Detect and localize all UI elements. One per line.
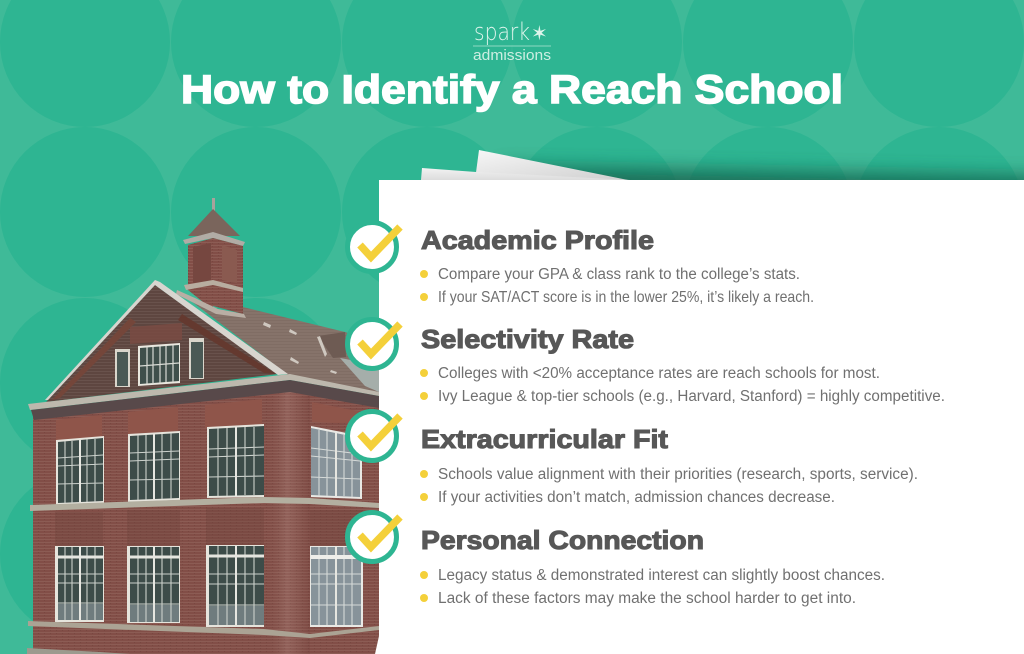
- bullets: If your activities don’t match, admission chances decrease.: [438, 489, 835, 506]
- check icon: [348, 512, 400, 562]
- panel shadow on background: [500, 166, 1024, 200]
- logo: spark admissions: admissions: [473, 47, 551, 64]
- roof edge trim: [45, 280, 288, 400]
- section: selectivity rate: [348, 320, 945, 405]
- bullets: [420, 266, 814, 306]
- paper sheets behind panel: [421, 150, 630, 180]
- bullets: Lack of these factors may make the school harder to get into.: [438, 590, 856, 607]
- lower spandrels: [55, 508, 362, 546]
- check icon: [348, 412, 400, 460]
- middle stone band: [30, 497, 379, 511]
- check icon: [348, 222, 400, 272]
- heading: Academic Profile: [421, 225, 654, 255]
- bullets: [420, 466, 918, 506]
- white content panel: [379, 180, 1024, 654]
- building illustration: [27, 198, 379, 654]
- logo: spark admissions: [473, 18, 551, 64]
- bullets: Colleges with <20% acceptance rates are reach schools for most.: [438, 365, 880, 382]
- logo: spark admissions: spark: [474, 18, 530, 46]
- gable wall: [46, 285, 278, 402]
- bullets: Legacy status & demonstrated interest can slightly boost chances.: [438, 567, 885, 584]
- bullets: Schools value alignment with their priorities (research, sports, service).: [438, 466, 918, 483]
- bullets: If your SAT/ACT score is in the lower 25%, it’s likely a reach.: [438, 289, 814, 306]
- gable window row: [115, 338, 204, 387]
- bullets: [420, 567, 885, 607]
- section: extracurricular fit: [348, 412, 918, 506]
- logo: spark admissions: ✶: [531, 23, 548, 45]
- bullets: Compare your GPA & class rank to the college’s stats.: [438, 266, 800, 283]
- main roof: [178, 291, 379, 393]
- spandrel panels: [56, 399, 362, 441]
- heading: Extracurricular Fit: [421, 424, 668, 454]
- check icon: [348, 320, 400, 368]
- upper windows: [56, 424, 362, 505]
- tower: [183, 198, 245, 314]
- section: academic profile: [348, 222, 814, 306]
- bullets: [420, 365, 945, 405]
- lower stone band: [28, 621, 379, 638]
- facade cut at lower right: [375, 636, 379, 654]
- title: How to Identify a Reach School: [181, 68, 843, 112]
- eave cornice: [28, 374, 379, 420]
- brick facade: [33, 381, 379, 654]
- heading: Selectivity Rate: [421, 324, 634, 354]
- heading: Personal Connection: [421, 525, 704, 555]
- plinth: [27, 648, 130, 654]
- lower windows: [55, 545, 363, 627]
- section: personal connection: [348, 512, 885, 607]
- bullets: Ivy League & top-tier schools (e.g., Harvard, Stanford) = highly competitive.: [438, 388, 945, 405]
